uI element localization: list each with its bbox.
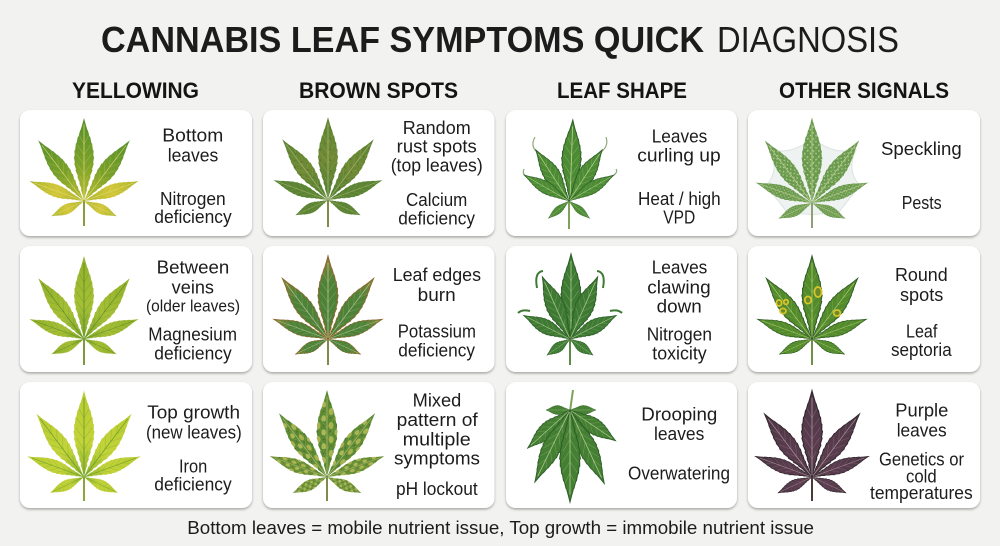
heading: yellowing: YELLOWING: [72, 78, 199, 103]
text: symptom and cause: Mixed: [413, 391, 461, 411]
text: symptom and cause: deficiency: [398, 341, 475, 361]
text: symptom and cause: cold: [906, 466, 937, 486]
icon: curling leaf: [521, 120, 617, 229]
text: symptom and cause: Genetics or: [879, 450, 964, 470]
text: symptom and cause: spots: [900, 285, 943, 305]
text: symptom and cause: [391, 118, 483, 228]
text: symptom and cause: Iron: [179, 456, 207, 476]
text: symptom and cause: curling up: [637, 146, 721, 166]
icon: clawing leaf: [518, 254, 622, 365]
text: symptom and cause: Leaf: [906, 322, 938, 342]
text: symptom and cause: Between: [157, 257, 229, 277]
text: symptom and cause: pH lockout: [396, 479, 478, 499]
text: symptom and cause: clawing: [647, 277, 711, 297]
icon: septoria leaf: [755, 256, 869, 365]
text: symptom and cause: Pests: [902, 193, 942, 213]
text: symptom and cause: [394, 391, 480, 499]
text: symptom and cause: Magnesium: [148, 325, 237, 345]
text: symptom and cause: Drooping: [641, 405, 717, 425]
text: symptom and cause: Top growth: [147, 402, 240, 422]
text: symptom and cause: Calcium: [406, 190, 467, 210]
title: CANNABIS LEAF SYMPTOMS QUICK: [101, 19, 704, 60]
text: symptom and cause: septoria: [891, 340, 953, 360]
icon: drooping leaf: [522, 390, 620, 502]
text: symptom and cause: deficiency: [154, 207, 232, 227]
text: symptom and cause: leaves: [654, 424, 704, 444]
text: symptom and cause: [870, 401, 973, 503]
text: symptom and cause: Bottom: [162, 126, 223, 146]
text: symptom and cause: temperatures: [870, 483, 973, 503]
title: DIAGNOSIS: [717, 19, 899, 60]
panel: leaf edges burn, potassium deficiency: [263, 246, 494, 372]
text: symptom and cause: toxicity: [652, 343, 707, 363]
text: symptom and cause: [154, 126, 232, 227]
text: symptom and cause: (new leaves): [146, 422, 242, 442]
text: symptom and cause: down: [657, 297, 702, 317]
icon: burnt edge leaf: [271, 256, 385, 365]
text: symptom and cause: Speckling: [881, 139, 962, 159]
text: symptom and cause: (older leaves): [146, 297, 240, 316]
text: symptom and cause: leaves: [168, 146, 218, 166]
text: symptom and cause: [637, 126, 721, 227]
text: symptom and cause: [146, 402, 242, 495]
panel: between veins, magnesium deficiency: [20, 246, 252, 372]
panel: mixed pattern, pH lockout: [263, 382, 494, 508]
panel: leaves curling up, heat or high VPD: [506, 110, 737, 236]
text: symptom and cause: Random: [403, 118, 471, 138]
icon: yellowing leaf: [27, 118, 141, 226]
icon: bright yellow leaf: [25, 391, 143, 501]
panel: speckling, pests: [748, 110, 980, 236]
text: symptom and cause: (top leaves): [391, 156, 483, 176]
text: symptom and cause: Nitrogen: [647, 325, 712, 345]
text: symptom and cause: VPD: [663, 207, 695, 227]
panel: random rust spots, calcium deficiency: [263, 110, 494, 236]
heading: leaf shape: LEAF SHAPE: [557, 78, 687, 103]
panel: bottom leaves, nitrogen deficiency: [20, 110, 252, 236]
text: symptom and cause: Leaf edges: [393, 265, 481, 285]
icon: purple leaf: [753, 391, 871, 501]
text: symptom and cause: deficiency: [154, 475, 232, 495]
text: symptom and cause: [891, 265, 953, 360]
panel: purple leaves, genetics or cold temperatures: [748, 382, 980, 508]
text: symptom and cause: Overwatering: [628, 463, 730, 483]
text: symptom and cause: rust spots: [397, 137, 477, 157]
text: symptom and cause: Round: [895, 265, 948, 285]
panel: leaves clawing down, nitrogen toxicity: [506, 246, 737, 372]
icon: interveinal yellowing leaf: [27, 256, 141, 365]
text: symptom and cause: leaves: [897, 421, 947, 441]
icon: mixed symptom leaf: [267, 390, 387, 501]
text: symptom and cause: pattern of: [397, 410, 479, 430]
text: symptom and cause: Potassium: [398, 322, 476, 342]
text: symptom and cause: deficiency: [154, 343, 232, 363]
text: symptom and cause: Leaves: [652, 126, 707, 146]
icon: speckled leaf with webbing: [754, 118, 870, 228]
text: symptom and cause: Heat / high: [638, 189, 721, 209]
text: symptom and cause: Purple: [895, 401, 948, 421]
panel: round spots, leaf septoria: [748, 246, 980, 372]
panel: top growth, iron deficiency: [20, 382, 252, 508]
text: symptom and cause: [628, 405, 730, 483]
text: symptom and cause: Nitrogen: [160, 189, 226, 209]
footer note: Bottom leaves = mobile nutrient issue, Top growth = immobile nutrient issue: [187, 518, 814, 538]
text: symptom and cause: Leaves: [652, 257, 707, 277]
icon: rust spotted leaf: [271, 117, 385, 227]
heading: other signals: OTHER SIGNALS: [779, 78, 949, 103]
text: symptom and cause: veins: [172, 277, 214, 297]
text: symptom and cause: [881, 139, 962, 213]
text: symptom and cause: burn: [418, 285, 456, 305]
text: symptom and cause: [146, 257, 240, 363]
text: symptom and cause: [647, 257, 712, 363]
text: symptom and cause: deficiency: [398, 208, 475, 228]
heading: brown spots: BROWN SPOTS: [299, 78, 458, 103]
text: symptom and cause: multiple: [403, 429, 471, 449]
panel: drooping leaves, overwatering: [506, 382, 737, 508]
text: symptom and cause: [393, 265, 481, 361]
text: symptom and cause: symptoms: [394, 448, 480, 468]
